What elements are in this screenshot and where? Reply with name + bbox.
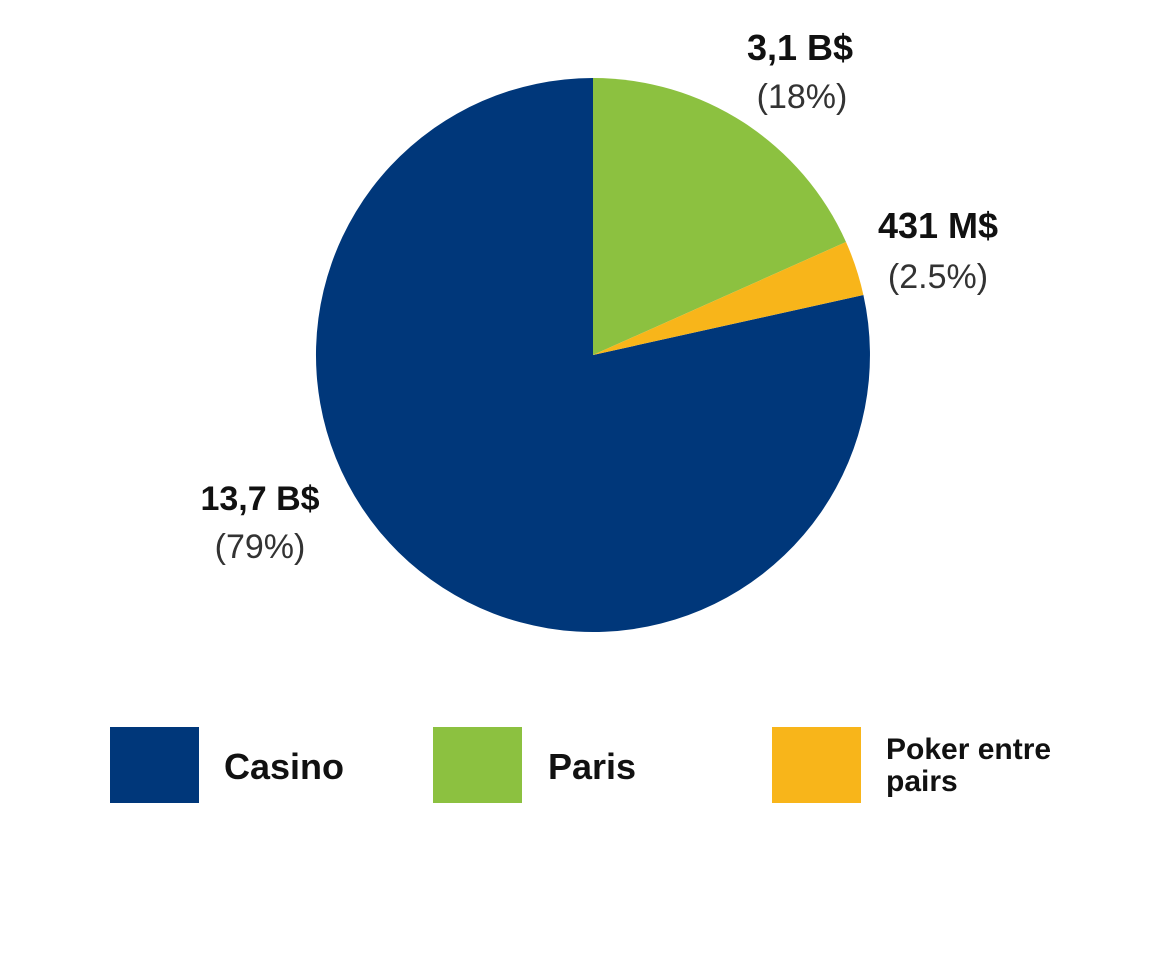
label: paris value: (18%) (757, 78, 847, 116)
label: poker value: 431 M$ (878, 205, 998, 246)
label: casino value (200, 480, 320, 566)
slice: paris (593, 78, 846, 355)
slice: casino (316, 78, 870, 632)
label: paris value: 3,1 B$ (747, 27, 853, 68)
legend item: casino (110, 727, 344, 803)
pie chart (316, 78, 870, 632)
legend item: poker: pairs (886, 765, 958, 798)
legend (110, 727, 1051, 803)
label: casino value: 13,7 B$ (200, 480, 320, 518)
label: paris value (747, 27, 853, 116)
slice: poker (593, 242, 863, 355)
legend item: casino: Casino (224, 746, 344, 787)
legend item: paris (433, 727, 636, 803)
label: poker value: (2.5%) (888, 258, 988, 296)
label: poker value (878, 205, 998, 296)
legend item: poker: Poker entre (886, 733, 1051, 766)
label: casino value: (79%) (215, 528, 305, 566)
legend item: poker (772, 727, 1051, 803)
legend item: paris: Paris (548, 746, 636, 787)
